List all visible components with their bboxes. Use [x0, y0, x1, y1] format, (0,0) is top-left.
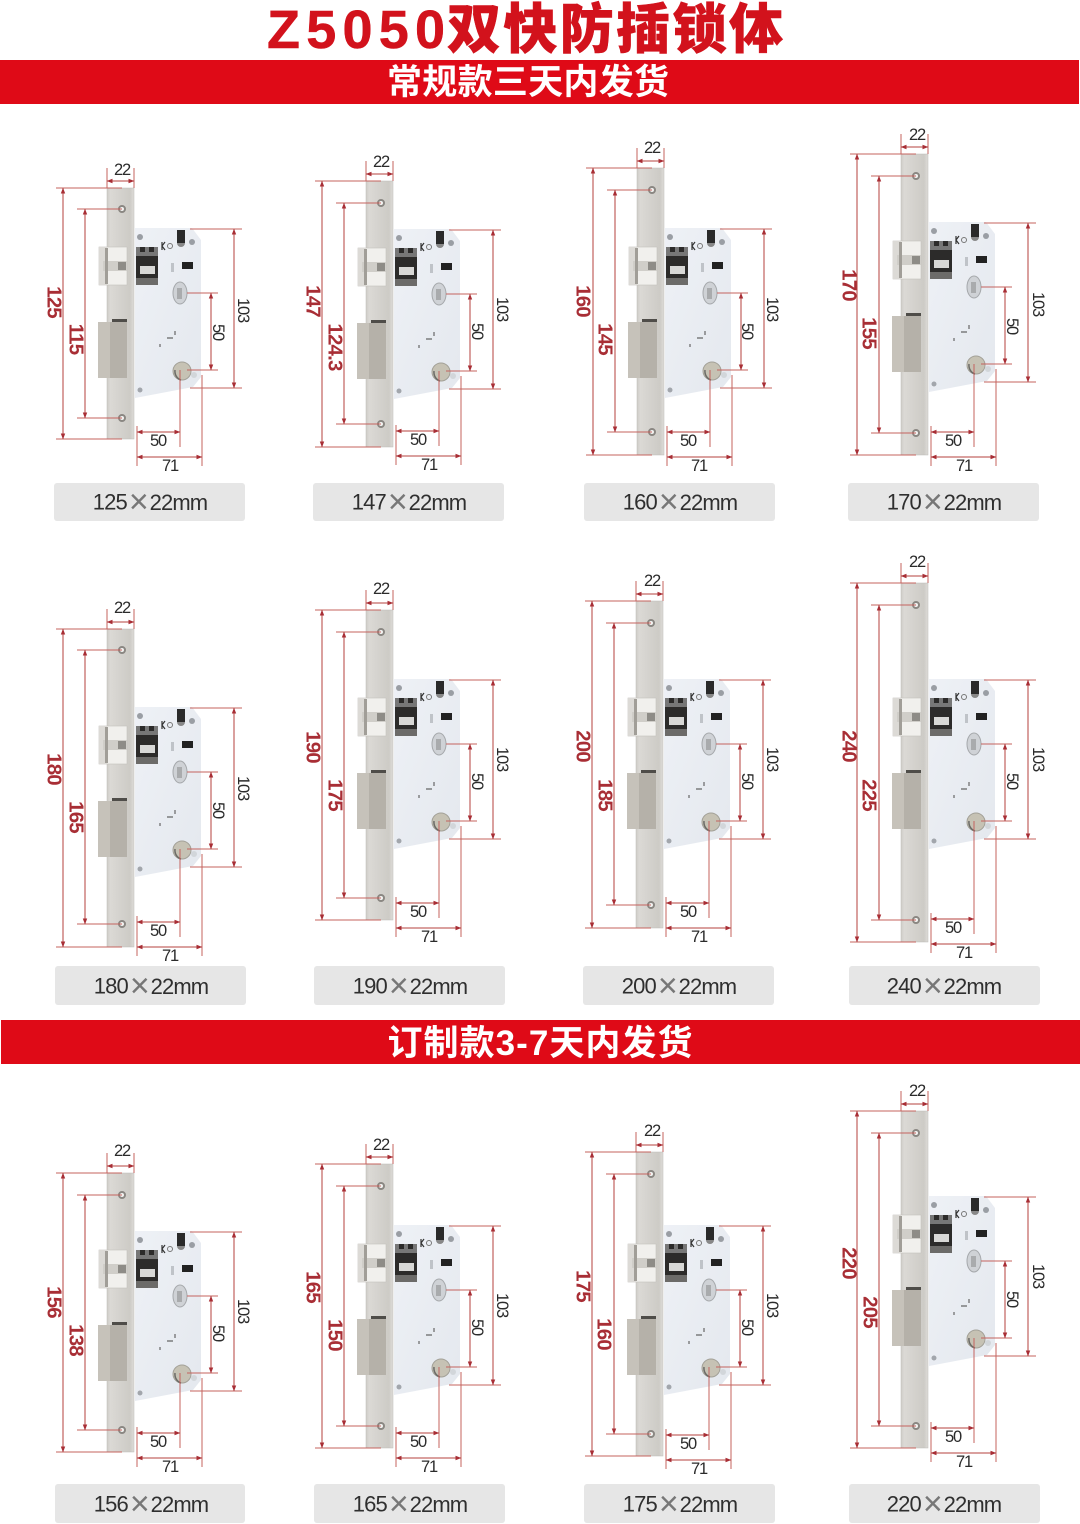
- size label: 180×22mm: [94, 967, 208, 1005]
- lock 160: [572, 139, 781, 521]
- dimension lines: [56, 1153, 202, 1467]
- faceplate: [366, 181, 393, 447]
- lock case: [892, 679, 1036, 849]
- dimension labels: 103: [493, 747, 511, 772]
- faceplate: [366, 610, 393, 920]
- dimension labels: 103: [1029, 747, 1047, 772]
- dimension labels: 22: [114, 1142, 131, 1160]
- size label: [313, 483, 504, 521]
- dimension labels: 50: [738, 1319, 756, 1336]
- banner: custom models: 订制款3-7天内发货: [388, 1024, 692, 1063]
- dimension labels: 185: [594, 779, 616, 811]
- dimension labels: 175: [572, 1270, 594, 1302]
- lock 165: [302, 1136, 511, 1523]
- dimension labels: 103: [1029, 1264, 1047, 1289]
- dimension labels: [572, 572, 781, 946]
- dimension labels: 50: [680, 432, 697, 450]
- dimension labels: 22: [114, 161, 131, 179]
- lock case: [627, 1225, 771, 1395]
- dimension labels: 50: [680, 903, 697, 921]
- lock case: [628, 228, 772, 398]
- size label: [54, 483, 245, 521]
- lock 220: [838, 1082, 1047, 1523]
- dimension labels: 50: [738, 323, 756, 340]
- dimension labels: 50: [209, 802, 227, 819]
- dimension labels: 50: [150, 922, 167, 940]
- dimension labels: 71: [691, 457, 708, 475]
- dimension labels: [572, 1122, 781, 1478]
- dimension labels: 22: [644, 572, 661, 590]
- faceplate: [107, 188, 134, 439]
- lock 200: [572, 572, 781, 1005]
- dimension labels: 71: [162, 947, 179, 965]
- dimension labels: 71: [691, 1460, 708, 1478]
- dimension labels: 71: [162, 457, 179, 475]
- dimension labels: 103: [234, 298, 252, 323]
- dimension lines: [850, 563, 996, 953]
- dimension labels: 103: [763, 297, 781, 322]
- size label: [584, 1484, 775, 1523]
- dimension labels: [838, 126, 1047, 475]
- dimension labels: 103: [763, 747, 781, 772]
- dimension labels: 50: [738, 773, 756, 790]
- size label: [314, 966, 505, 1005]
- dimension labels: 125: [42, 286, 66, 318]
- banner: regular models: [0, 60, 1079, 104]
- dimension labels: 22: [373, 580, 390, 598]
- lock case: [892, 1196, 1036, 1366]
- faceplate: [901, 583, 928, 942]
- dimension labels: 22: [644, 1122, 661, 1140]
- faceplate: [901, 154, 928, 455]
- lock 190: [302, 580, 511, 1005]
- lock case: [357, 679, 501, 849]
- dimension labels: [572, 139, 781, 475]
- lock case: [98, 1231, 242, 1401]
- dimension labels: [302, 580, 511, 946]
- size label: [848, 483, 1039, 521]
- dimension labels: 50: [945, 1428, 962, 1446]
- size label: [584, 483, 775, 521]
- dimension labels: 71: [421, 456, 438, 474]
- dimension labels: 50: [410, 431, 427, 449]
- dimension labels: 50: [468, 773, 486, 790]
- dimension labels: [302, 153, 511, 474]
- lock 240: [838, 553, 1047, 1005]
- dimension labels: 50: [150, 1433, 167, 1451]
- size label: 175×22mm: [623, 1485, 737, 1523]
- size label: 170×22mm: [887, 483, 1001, 521]
- lock 147: [302, 153, 511, 521]
- size label: 165×22mm: [353, 1485, 467, 1523]
- size label: [55, 966, 246, 1005]
- dimension labels: 180: [42, 753, 66, 785]
- dimension lines: [850, 1091, 996, 1462]
- dimension lines: [315, 1144, 461, 1467]
- title: 双快防插锁体: [447, 0, 783, 60]
- faceplate: [636, 601, 663, 928]
- dimension labels: 50: [468, 323, 486, 340]
- dimension labels: 220: [838, 1247, 860, 1279]
- dimension labels: 103: [493, 1293, 511, 1318]
- lock 170: [838, 126, 1047, 521]
- lock 156: [42, 1142, 252, 1523]
- size label: 220×22mm: [887, 1485, 1001, 1523]
- title: Z5050: [267, 0, 445, 60]
- dimension labels: 22: [373, 153, 390, 171]
- size label: 156×22mm: [94, 1485, 208, 1523]
- dimension labels: 71: [421, 1458, 438, 1476]
- dimension labels: 50: [468, 1319, 486, 1336]
- banner: custom models: [1, 1020, 1080, 1064]
- lock case: [357, 229, 501, 399]
- dimension labels: 71: [956, 457, 973, 475]
- dimension labels: [42, 1142, 252, 1476]
- size label: 160×22mm: [623, 483, 737, 521]
- lock 175: [572, 1122, 781, 1523]
- dimension labels: [838, 553, 1047, 962]
- size label: [583, 966, 774, 1005]
- dimension lines: [315, 161, 461, 465]
- dimension labels: 124.3: [324, 323, 346, 371]
- lock case: [98, 707, 242, 877]
- lock case: [98, 228, 242, 398]
- dimension labels: [42, 599, 252, 965]
- dimension labels: 160: [592, 1318, 616, 1350]
- dimension labels: 71: [421, 928, 438, 946]
- dimension labels: 22: [909, 126, 926, 144]
- dimension labels: 22: [373, 1136, 390, 1154]
- dimension labels: 150: [324, 1319, 346, 1351]
- lock 125: [42, 161, 252, 521]
- dimension labels: 145: [594, 323, 616, 355]
- dimension labels: 22: [114, 599, 131, 617]
- dimension labels: 50: [680, 1435, 697, 1453]
- dimension labels: 71: [956, 1453, 973, 1471]
- dimension labels: 205: [858, 1296, 882, 1328]
- dimension labels: 50: [410, 903, 427, 921]
- dimension labels: 225: [858, 779, 880, 811]
- size label: 190×22mm: [353, 967, 467, 1005]
- dimension labels: 71: [162, 1458, 179, 1476]
- size label: [314, 1484, 505, 1523]
- size label: [849, 1484, 1040, 1523]
- dimension labels: 50: [1003, 318, 1021, 335]
- dimension labels: 170: [838, 269, 860, 301]
- dimension labels: 165: [64, 801, 88, 833]
- dimension lines: [585, 581, 731, 937]
- dimension labels: 103: [763, 1293, 781, 1318]
- lock case: [627, 679, 771, 849]
- size label: 200×22mm: [622, 967, 736, 1005]
- size label: [849, 966, 1040, 1005]
- dimension labels: [42, 161, 252, 475]
- dimension labels: 160: [572, 285, 594, 317]
- dimension labels: 190: [302, 731, 324, 763]
- dimension lines: [586, 148, 732, 466]
- lock 180: [42, 599, 252, 1005]
- faceplate: [107, 629, 134, 947]
- dimension labels: [302, 1136, 511, 1476]
- dimension labels: 50: [1003, 1291, 1021, 1308]
- dimension lines: [585, 1132, 731, 1469]
- banner: regular models: 常规款三天内发货: [387, 63, 669, 102]
- dimension labels: 103: [1029, 292, 1047, 317]
- dimension labels: 71: [956, 944, 973, 962]
- size label: [55, 1484, 245, 1523]
- dimension labels: 50: [410, 1433, 427, 1451]
- dimension labels: 240: [838, 730, 860, 762]
- faceplate: [637, 168, 664, 455]
- dimension lines: [56, 168, 202, 466]
- faceplate: [901, 1111, 928, 1448]
- dimension labels: 50: [209, 1325, 227, 1342]
- dimension labels: 165: [302, 1271, 324, 1303]
- dimension labels: 22: [644, 139, 661, 157]
- dimension labels: 147: [302, 285, 324, 317]
- size label: 125×22mm: [93, 483, 207, 521]
- dimension labels: [838, 1082, 1047, 1471]
- dimension labels: 71: [691, 928, 708, 946]
- dimension lines: [850, 134, 996, 466]
- dimension labels: 103: [234, 1299, 252, 1324]
- dimension lines: [315, 590, 461, 937]
- dimension labels: 115: [64, 324, 88, 355]
- dimension labels: 22: [909, 1082, 926, 1100]
- dimension lines: [56, 609, 202, 956]
- size label: 147×22mm: [352, 483, 466, 521]
- dimension labels: 138: [64, 1324, 88, 1356]
- dimension labels: 175: [324, 779, 346, 811]
- dimension labels: 50: [150, 432, 167, 450]
- dimension labels: 103: [234, 776, 252, 801]
- lock case: [357, 1225, 501, 1395]
- size label: 240×22mm: [887, 967, 1001, 1005]
- faceplate: [366, 1164, 393, 1448]
- dimension labels: 103: [493, 297, 511, 322]
- dimension labels: 156: [42, 1286, 66, 1318]
- dimension labels: 200: [572, 730, 594, 762]
- dimension labels: 50: [945, 919, 962, 937]
- faceplate: [636, 1152, 663, 1456]
- dimension labels: 50: [209, 324, 227, 341]
- dimension labels: 155: [858, 317, 880, 349]
- dimension labels: 50: [945, 432, 962, 450]
- faceplate: [107, 1173, 134, 1452]
- dimension labels: 50: [1003, 773, 1021, 790]
- dimension labels: 22: [909, 553, 926, 571]
- lock case: [892, 222, 1036, 392]
